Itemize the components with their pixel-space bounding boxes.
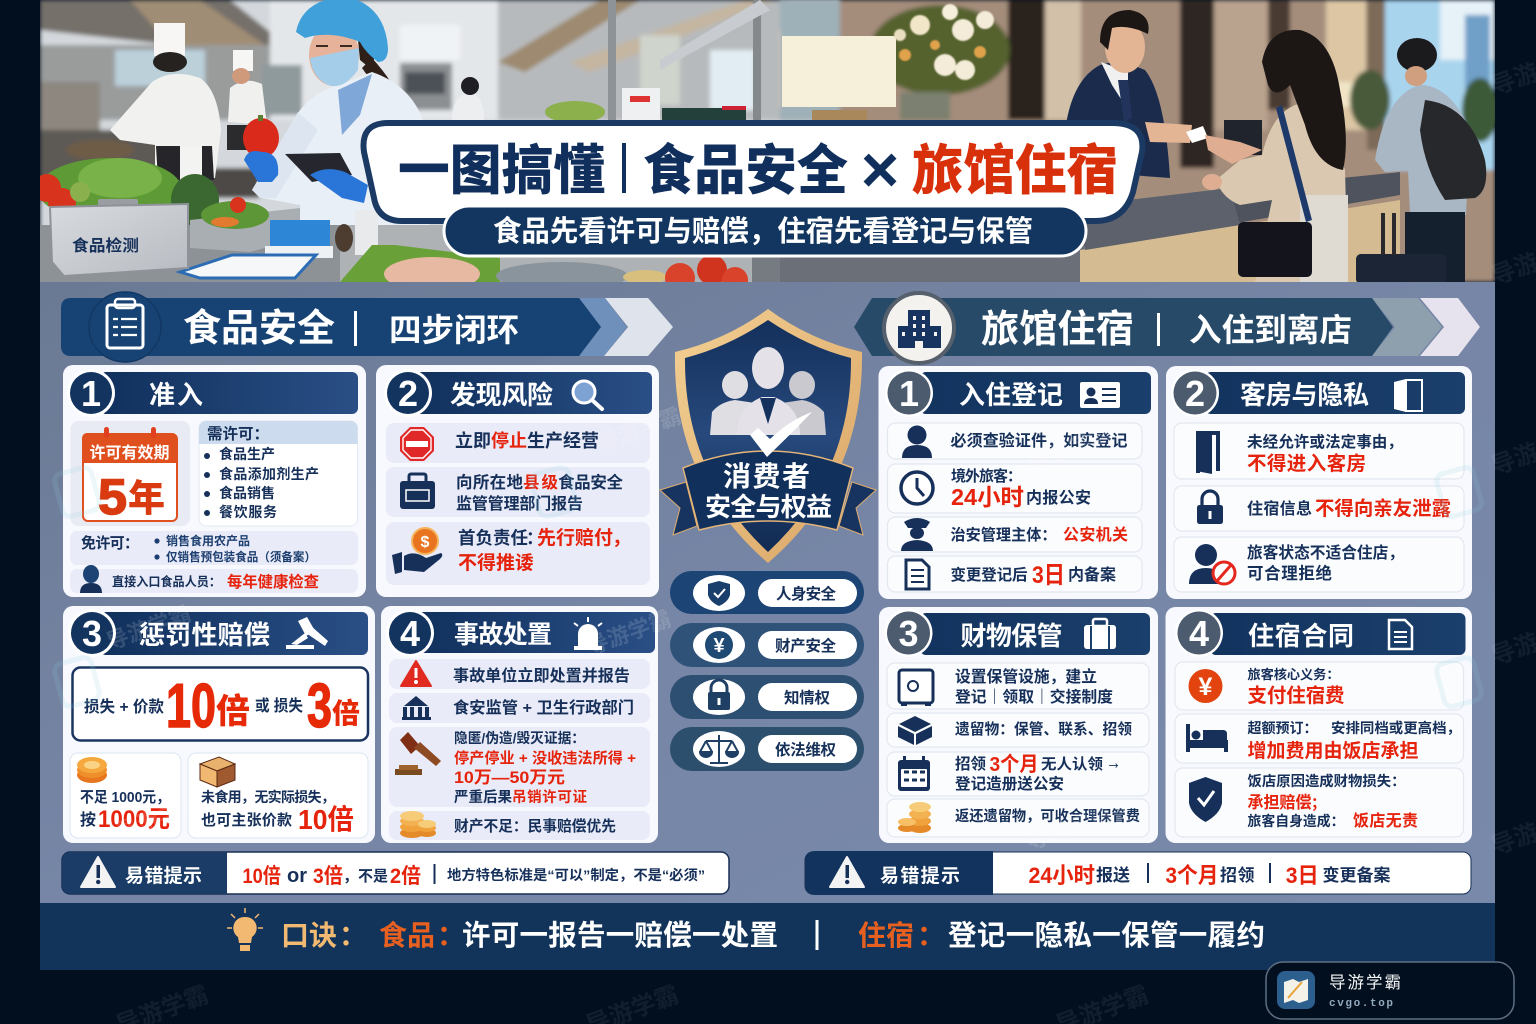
permit required list: 食品生产	[219, 446, 275, 462]
return items row: 返还遗留物，可收合理保管费	[955, 807, 1140, 825]
panel: lodging step 4 contract	[1166, 607, 1472, 843]
pill: personal safety	[670, 571, 864, 614]
icon: yen circle	[1188, 669, 1222, 703]
title times symbol: ×	[861, 132, 899, 206]
woman inspector	[362, 60, 390, 80]
liability row: 饭店原因造成财物损失：	[1248, 772, 1406, 790]
lost items row: 遗留物：保管、联系、招领	[955, 720, 1132, 738]
icon: open door	[1196, 431, 1220, 474]
multiplier box: 倍	[332, 697, 360, 729]
icon: government building	[402, 696, 431, 720]
compensation row: 不得推诿	[458, 552, 534, 574]
compensation row	[386, 522, 650, 585]
tip bar: lodging mistakes: 24小时	[1028, 863, 1095, 888]
stop row: 生产经营	[527, 430, 599, 451]
step header: 准入	[149, 380, 203, 410]
multiplier box: 倍	[216, 692, 250, 731]
step header: 住宿合同	[1248, 621, 1354, 651]
watermarks: 导游学霸	[1023, 801, 1114, 855]
icon: document	[906, 560, 929, 589]
main panel background	[40, 282, 1495, 904]
icon: warning triangle	[81, 857, 115, 887]
permit required list: 需许可：	[207, 425, 269, 443]
permit exempt list	[70, 531, 358, 565]
multiplier box	[72, 668, 368, 741]
icon: safe	[899, 670, 933, 706]
icon: police officer	[901, 518, 933, 551]
step header	[384, 369, 652, 417]
uneaten food card: 也可主张价款	[201, 811, 292, 829]
permit required list: 餐饮服务	[219, 504, 277, 520]
left section banner: food safety	[61, 292, 673, 362]
footer mnemonic bar: 住宿	[858, 920, 914, 951]
multiplier box: 3	[307, 672, 332, 741]
authority row	[888, 517, 1142, 552]
compensation row: ：	[526, 528, 544, 548]
left section banner: food safety: 食品安全	[183, 308, 335, 350]
step header: 客房与隐私	[1240, 380, 1369, 410]
footer mnemonic bar: 食品	[379, 920, 435, 951]
chef 1	[154, 23, 185, 56]
permit validity calendar: 年	[128, 478, 165, 519]
health check row: 每年健康检查	[227, 572, 319, 591]
verify id row: 必须查验证件，如实登记	[950, 431, 1128, 450]
report row: 县级	[523, 472, 558, 492]
change record row: 内备案	[1068, 565, 1116, 584]
permit exempt list: 免许可：	[81, 534, 139, 552]
change record row: 3日	[1032, 562, 1065, 589]
step header	[1175, 609, 1466, 657]
tip bar: lodging mistakes: 招领	[1220, 866, 1254, 885]
footer mnemonic bar: ：	[917, 920, 945, 951]
icon: parcel box	[200, 757, 235, 787]
storage facility row: 登记｜领取｜交接制度	[955, 687, 1113, 706]
report row: 事故单位立即处置并报告	[453, 666, 630, 685]
overseas guest row: 境外旅客：	[951, 467, 1022, 485]
step header: 1	[81, 373, 101, 414]
right section banner: hotel lodging: 旅馆住宿	[981, 309, 1134, 351]
report row: 监管管理部门报告	[456, 494, 583, 513]
icon: clipboard	[89, 292, 161, 362]
step header: 惩罚性赔偿	[139, 620, 270, 650]
liability row: 饭店无责	[1353, 812, 1418, 830]
subtitle pill	[444, 206, 1086, 256]
step header	[386, 609, 655, 657]
uneaten food card	[188, 753, 368, 838]
compensation row: 先行赔付	[537, 527, 613, 549]
icon: gavel white	[286, 617, 328, 649]
watermarks: 导游学霸	[113, 791, 204, 845]
icon: calendar	[898, 756, 930, 791]
tip bar: food mistakes: or	[287, 865, 307, 887]
icon: check shield	[1189, 777, 1222, 822]
footer mnemonic bar: 口诀	[281, 920, 337, 951]
property row: 财产不足：民事赔偿优先	[454, 817, 616, 835]
icon: padlock	[1197, 491, 1223, 524]
footer mnemonic bar: ：	[339, 920, 367, 951]
icon: yen circle: ¥	[1199, 673, 1213, 701]
pill: legal rights	[670, 727, 864, 771]
panel: food step 3 punitive damages	[63, 606, 375, 843]
overbooking row: 安排同档或更高档，	[1331, 719, 1461, 737]
minimum 1000 card: 1000元	[98, 806, 170, 833]
icon: cube	[898, 716, 932, 745]
do not enter row	[1174, 423, 1464, 479]
ribbon	[660, 451, 876, 535]
step header: 发现风险	[450, 380, 553, 410]
authority row	[389, 693, 650, 723]
overbooking row: 超额预订：	[1248, 719, 1318, 737]
tip bar: lodging mistakes: 3日	[1286, 863, 1319, 888]
step header: 4	[1189, 613, 1209, 654]
report row	[386, 467, 650, 517]
test tube rack	[270, 220, 330, 248]
subtitle pill: 食品先看许可与赔偿，住宿先看登记与保管	[493, 215, 1033, 248]
tip bar: food mistakes: 易错提示	[125, 865, 202, 887]
verify id row	[888, 423, 1142, 459]
icon: yen coin: ¥	[713, 635, 725, 657]
tip bar: lodging mistakes: 报送	[1096, 866, 1130, 885]
title plate	[364, 123, 1142, 221]
icon: lock	[708, 680, 730, 710]
payment row: 旅客核心义务：	[1248, 666, 1340, 682]
overbooking row: 增加费用由饭店承担	[1248, 739, 1418, 762]
lamp	[782, 36, 896, 107]
tip bar: food mistakes: 不是	[358, 868, 388, 885]
footer mnemonic bar	[40, 903, 1495, 970]
icon: scales	[700, 735, 738, 763]
report row: 食品安全	[558, 472, 624, 492]
claim period row: 登记造册送公安	[955, 775, 1064, 793]
step header: 事故处置	[454, 621, 552, 649]
change record row	[888, 556, 1142, 592]
icon: coin stack	[77, 757, 107, 783]
compensation row: ，	[612, 528, 631, 549]
do not enter row: 未经允许或法定事由，	[1247, 432, 1403, 451]
icon: id card	[1080, 382, 1120, 408]
icon: coin pile	[898, 802, 931, 833]
icon: briefcase	[400, 474, 435, 509]
lost items row	[887, 713, 1149, 747]
authority row: 公安机关	[1063, 525, 1128, 544]
minimum 1000 card: 不足 1000元，	[80, 789, 170, 806]
health check row: 直接入口食品人员：	[112, 574, 221, 589]
pill: personal safety: 人身安全	[776, 584, 836, 603]
liability row	[1175, 768, 1464, 837]
evidence row: 隐匿/伪造/毁灭证据：	[454, 730, 585, 746]
overseas guest row: 内报公安	[1026, 488, 1091, 507]
icon: door white	[1394, 379, 1422, 412]
inspection case	[50, 199, 188, 276]
icon: shield	[708, 581, 730, 606]
icon: bed	[1186, 724, 1228, 752]
claim period row	[887, 752, 1149, 796]
panel: food step 2 risk found	[376, 365, 659, 597]
center shield: consumer safety and rights	[660, 309, 876, 563]
claim period row: 无人认领	[1041, 756, 1103, 773]
icon: clock	[901, 472, 933, 504]
tip bar: lodging mistakes	[805, 851, 1471, 895]
guest woman	[1216, 104, 1348, 282]
step header: 2	[1185, 373, 1205, 414]
tip bar: food mistakes: ，	[343, 868, 358, 885]
watermarks: 导游学霸	[593, 403, 684, 457]
step header	[67, 369, 358, 417]
icon: three people	[710, 347, 826, 435]
step header: 财物保管	[960, 621, 1062, 651]
panel: lodging step 3 property storage	[879, 607, 1158, 843]
left section banner: food safety: 四步闭环	[389, 312, 519, 348]
evidence row	[389, 727, 650, 807]
evidence row: 停产停业 + 没收违法所得 +	[454, 749, 636, 767]
step header	[1171, 369, 1465, 417]
tip bar: lodging mistakes: 3个月	[1166, 863, 1218, 888]
step header: 4	[400, 613, 420, 654]
hero photo: food inspection kitchen	[33, 0, 840, 293]
pill: property safety	[670, 623, 864, 667]
hero photo: hotel front desk	[780, 0, 1498, 284]
icon: warning	[401, 661, 431, 686]
step header: 2	[398, 373, 418, 414]
refuse guest row	[1174, 537, 1464, 592]
icon: food handler	[80, 565, 102, 593]
step header: 3	[82, 613, 102, 654]
brand badge: cvgo.top	[1329, 998, 1393, 1010]
back figure	[452, 102, 484, 120]
ribbon: 安全与权益	[705, 492, 832, 522]
ribbon: 消费者	[723, 461, 810, 492]
tip bar: food mistakes: 地方特色标准是“可以”制定，不是“必须”	[447, 867, 705, 883]
return items row	[887, 799, 1149, 837]
report row	[389, 659, 650, 689]
icon: hotel building	[884, 293, 954, 363]
right section banner: hotel lodging	[854, 293, 1480, 363]
permit required list: 食品销售	[219, 485, 275, 501]
step header	[885, 369, 1151, 417]
info privacy row: 住宿信息	[1247, 499, 1312, 518]
tip bar: lodging mistakes: 变更备案	[1322, 865, 1390, 885]
health check row	[70, 565, 358, 593]
pill: legal rights: 依法维权	[775, 740, 836, 759]
overseas guest row: 24小时	[951, 484, 1024, 510]
permit exempt list: 仅销售预包装食品（须备案）	[166, 549, 316, 564]
icon: brown gavel	[395, 732, 441, 775]
info privacy row	[1174, 486, 1464, 531]
uneaten food card: 未食用，无实际损失，	[201, 789, 335, 805]
uneaten food card: 10倍	[298, 804, 354, 835]
icon: contract document	[1389, 620, 1412, 649]
evidence row: 10万—50万元	[454, 768, 565, 787]
pill: right to know: 知情权	[784, 688, 830, 707]
tip bar: lodging mistakes: 易错提示	[880, 865, 960, 887]
permit required list: 食品添加剂生产	[219, 466, 319, 482]
icon: hand with coin: $	[421, 534, 430, 551]
icon: brand map	[1277, 971, 1315, 1009]
permit exempt list: 销售食用农产品	[166, 533, 250, 548]
payment row: 支付住宿费	[1248, 684, 1344, 707]
stop row: 立即	[455, 430, 491, 451]
icon: gold coins	[400, 811, 436, 838]
receptionist	[1063, 60, 1170, 178]
panel: food step 1 admission	[63, 365, 366, 597]
watermarks: 导游学霸	[1023, 421, 1114, 475]
step header: 1	[899, 373, 919, 414]
chef 2	[233, 50, 253, 71]
multiplier box: 损失 + 价款	[84, 698, 164, 716]
vegetables and tomatoes	[42, 158, 179, 207]
authority row: 食安监管 + 卫生行政部门	[453, 698, 634, 717]
icon: hand with coin	[392, 528, 442, 574]
clipboard	[180, 255, 316, 278]
overseas guest row	[888, 464, 1142, 513]
footer mnemonic bar: 许可一报告一赔偿一处置	[462, 920, 778, 952]
payment row	[1175, 662, 1464, 710]
change record row: 变更登记后	[950, 565, 1028, 584]
icon: light bulb	[227, 908, 263, 951]
permit validity calendar	[70, 421, 190, 526]
icon: suitcase	[1084, 619, 1116, 649]
tip bar: food mistakes	[62, 852, 729, 894]
permit validity calendar: 5	[98, 469, 127, 525]
storage facility row	[887, 663, 1149, 709]
panel: lodging step 1 registration	[878, 366, 1158, 599]
refuse guest row: 可合理拒绝	[1247, 563, 1332, 583]
claim period row: →	[1106, 752, 1121, 774]
right section banner: hotel lodging: 入住到离店	[1189, 312, 1352, 348]
inspection case: 食品检测	[72, 236, 139, 255]
guest man	[1375, 85, 1470, 215]
claim period row: 招领	[955, 755, 986, 773]
permit validity calendar: 许可有效期	[90, 443, 170, 462]
panel: food step 4 incident handling	[381, 606, 658, 843]
panel: lodging step 2 room privacy	[1166, 366, 1472, 599]
brand badge: 导游学霸	[1329, 973, 1401, 992]
pill: right to know	[670, 675, 864, 719]
step header	[68, 609, 368, 657]
title text lodging: 旅馆住宿	[912, 141, 1118, 201]
liability row: ；	[1311, 795, 1326, 812]
stop row	[386, 423, 650, 463]
flower bouquet	[894, 4, 994, 80]
icon: warning triangle	[830, 857, 864, 887]
permit required list	[199, 421, 358, 526]
compensation row: 首负责任	[458, 528, 528, 548]
multiplier box: 或 损失	[255, 696, 303, 715]
stop row: 停止	[491, 430, 527, 451]
tip bar: food mistakes: 2倍	[390, 864, 421, 888]
title text food safety: 食品安全	[643, 141, 848, 201]
step header: 入住登记	[959, 380, 1063, 410]
multiplier box: 10	[166, 672, 216, 741]
footer mnemonic bar: 登记一隐私一保管一履约	[948, 920, 1265, 952]
icon: person with prohibition	[1189, 544, 1235, 584]
refuse guest row: 旅客状态不适合住店，	[1247, 543, 1404, 562]
step header: 3	[898, 613, 919, 654]
storage facility row: 设置保管设施，建立	[955, 667, 1097, 686]
minimum 1000 card: 按	[80, 810, 96, 829]
icon: check mark	[750, 412, 812, 457]
info privacy row: 不得向亲友泄露	[1315, 497, 1452, 520]
footer mnemonic bar: ：	[437, 920, 465, 951]
liability row: 旅客自身造成：	[1248, 813, 1344, 829]
authority row: 治安管理主体：	[950, 525, 1056, 544]
report row: 向所在地	[456, 473, 524, 492]
icon: magnifier	[573, 381, 602, 409]
food tray	[190, 208, 300, 252]
fresh food	[340, 245, 500, 282]
liability row: 承担赔偿	[1248, 792, 1312, 812]
tip bar: food mistakes: 10倍	[242, 864, 281, 888]
marble counter	[1080, 172, 1400, 250]
brand badge	[1266, 962, 1514, 1019]
pill: property safety: 财产安全	[775, 636, 836, 655]
watermarks: 导游学霸	[103, 601, 194, 655]
do not enter row: 不得进入客房	[1247, 452, 1366, 475]
step header	[884, 609, 1150, 657]
icon: yen coin	[705, 631, 733, 659]
suitcase	[1356, 254, 1405, 282]
claim period row: 3个月	[990, 753, 1038, 776]
watermarks: 导游学霸	[583, 606, 674, 660]
title text left: 一图搞懂	[398, 141, 605, 201]
tip bar: food mistakes: 3倍	[313, 864, 343, 888]
evidence row: 吊销许可证	[512, 788, 588, 806]
icon: alarm light	[574, 617, 602, 650]
icon: person	[902, 426, 932, 458]
overbooking row	[1175, 714, 1464, 763]
evidence row: 严重后果	[454, 789, 512, 806]
minimum 1000 card	[70, 753, 181, 838]
icon: stop sign	[400, 427, 434, 461]
property row	[389, 811, 650, 840]
